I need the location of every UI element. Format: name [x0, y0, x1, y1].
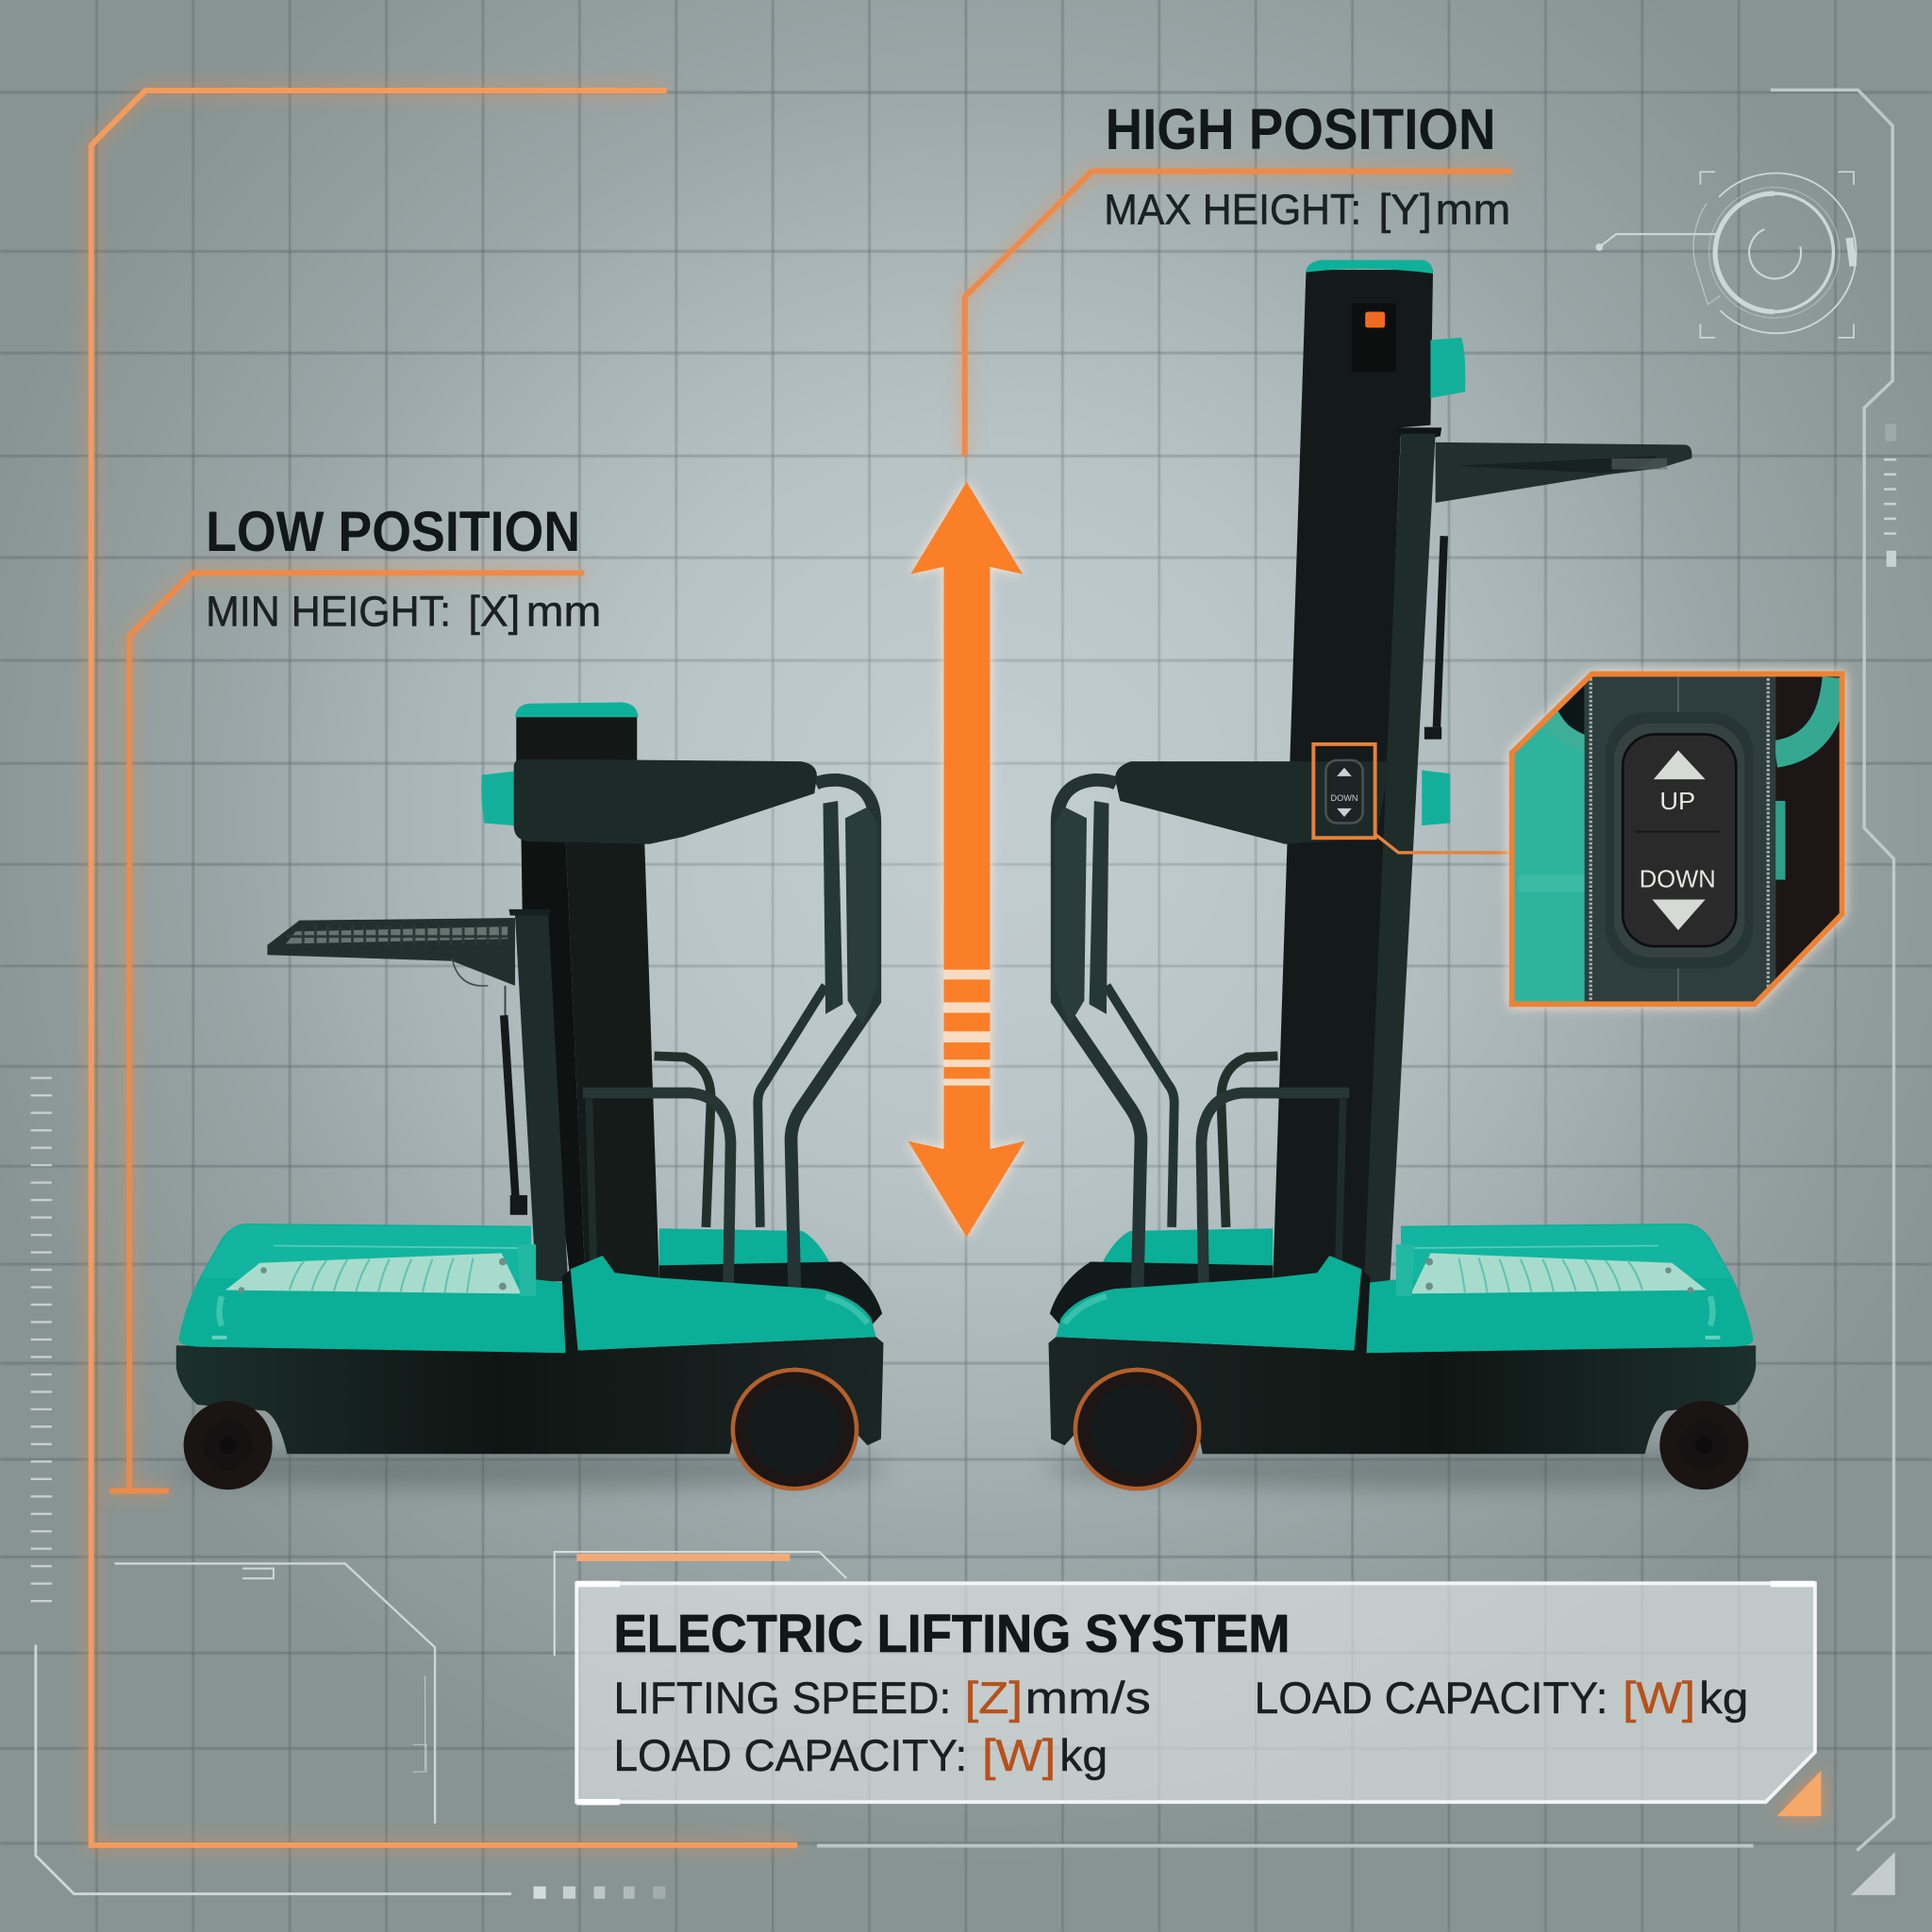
low mast column [508, 702, 659, 1281]
label: min height: mm [526, 588, 601, 636]
label: min height: MIN HEIGHT: [206, 588, 451, 636]
callout inset: up/down switch [1512, 674, 1842, 1004]
right HUD frame [1771, 90, 1894, 1851]
panel top accent [555, 1552, 846, 1656]
bottom grey rule [817, 1844, 1754, 1847]
callout inset: up/down switch: DOWN [1640, 864, 1716, 892]
lifting arrow [908, 482, 1025, 1237]
lifting speed spec: LIFTING SPEED: [613, 1673, 951, 1723]
lifting speed spec [613, 1673, 1151, 1723]
high teal box [1430, 338, 1465, 398]
label: min height: [X] [468, 588, 520, 636]
low position leader line [109, 573, 584, 1491]
bottom-left HUD lines [36, 1563, 511, 1894]
label: min height [206, 588, 601, 636]
label: max height [1104, 186, 1510, 234]
callout inset: up/down switch: UP [1659, 787, 1695, 815]
low tray [267, 918, 515, 986]
label: max height: MAX HEIGHT: [1104, 186, 1361, 234]
label: max height: mm [1436, 186, 1510, 234]
low strut [504, 986, 527, 1215]
high console arm [1115, 761, 1390, 844]
load capacity spec left: LOAD CAPACITY: [613, 1730, 967, 1780]
orange corner triangle [1776, 1771, 1821, 1816]
outer orange frame [92, 91, 797, 1845]
lifting speed spec: [Z] [965, 1673, 1023, 1723]
load capacity spec left: [W] [982, 1730, 1056, 1780]
load capacity spec right: [W] [1623, 1673, 1695, 1723]
panel heading: ELECTRIC LIFTING SYSTEM [613, 1604, 1291, 1663]
load capacity spec left: kg [1059, 1730, 1108, 1780]
load capacity spec right: LOAD CAPACITY: [1255, 1673, 1607, 1723]
high position leader line [965, 172, 1512, 456]
small switch highlight box: DOWN [1331, 793, 1357, 803]
high lower teal box [1422, 770, 1450, 825]
right tick scale [1884, 424, 1896, 567]
heading: low position: LOW POSITION [206, 500, 580, 563]
small switch highlight box [1313, 744, 1375, 838]
panel: electric lifting system [576, 1581, 1815, 1805]
grey corner triangle [1851, 1852, 1895, 1895]
connector line to inset [1375, 834, 1512, 853]
left tick scale [33, 1077, 49, 1605]
lifting speed spec: mm/s [1025, 1673, 1151, 1723]
high mast column [1273, 260, 1441, 1284]
forklift: low position [173, 702, 887, 1491]
high strut [1424, 536, 1444, 740]
icon: target reticle [1596, 172, 1857, 338]
label: max height: [Y] [1379, 186, 1432, 234]
low console arm [514, 759, 817, 844]
heading: high position: HIGH POSITION [1106, 97, 1496, 162]
high tray [1436, 442, 1691, 503]
forklift: high position [1045, 260, 1759, 1491]
low teal box [481, 772, 514, 825]
pagination dots [534, 1887, 665, 1899]
load capacity spec right: kg [1699, 1673, 1748, 1723]
